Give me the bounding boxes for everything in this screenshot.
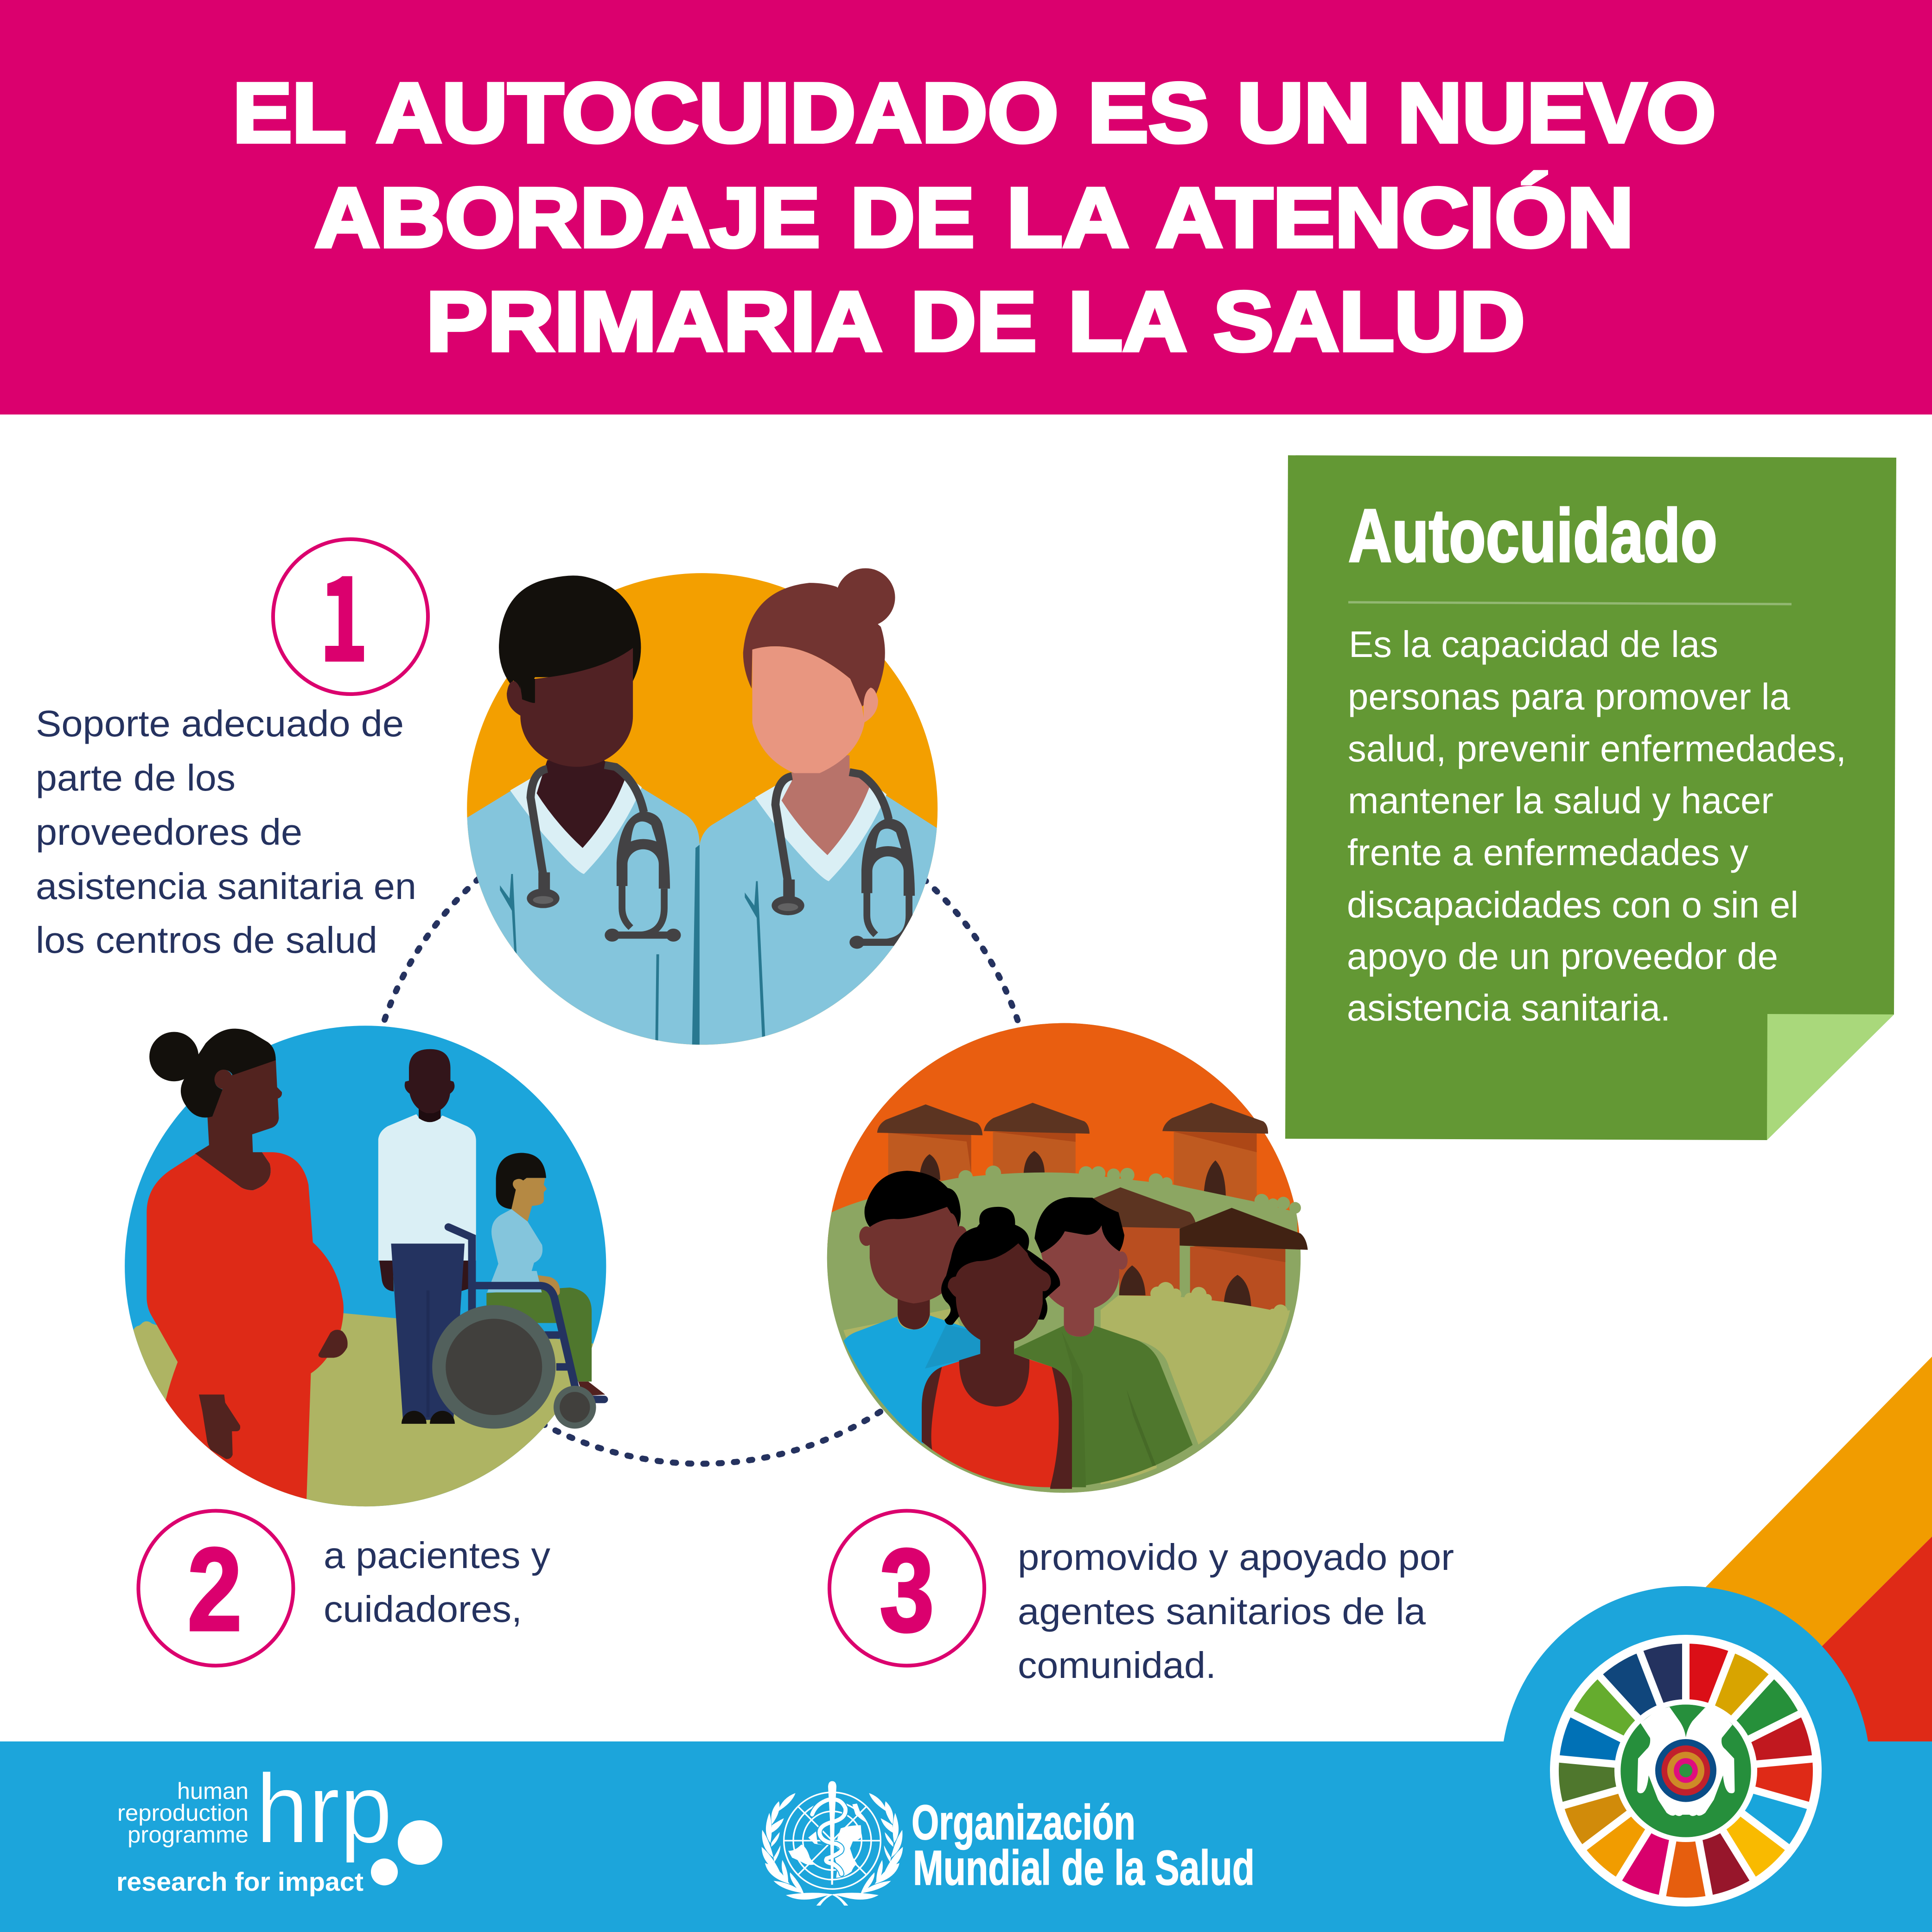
snake and staff — [812, 1799, 846, 1874]
back hill — [816, 1173, 1297, 1498]
title: ATENCIÓN — [1156, 170, 1634, 265]
title: DE — [850, 170, 975, 265]
wheel segments — [1551, 1636, 1820, 1904]
step 1 text: parte de los — [36, 757, 236, 798]
logo: hrp research for impact: hrp — [256, 1753, 392, 1863]
note body text: Es la capacidad de las — [1349, 624, 1718, 665]
title: DE — [911, 274, 1037, 369]
laurel wreath right — [861, 1793, 903, 1893]
step 3 text — [1018, 1537, 1454, 1686]
left provider — [499, 575, 641, 848]
step 1 number badge — [273, 526, 428, 694]
title: NUEVO — [1397, 65, 1716, 160]
logo: WHO emblem — [762, 1781, 903, 1906]
note body text: discapacidades con o sin el — [1347, 884, 1798, 925]
step 2 number badge — [138, 1511, 293, 1665]
illustration: community health workers and village — [816, 1011, 1326, 1498]
note body text: frente a enfermedades y — [1347, 832, 1748, 873]
step 3 text: promovido y apoyado por — [1018, 1537, 1454, 1578]
step 1 text — [36, 703, 416, 961]
front hill — [839, 1282, 1323, 1498]
dotted ring connecting the three circles — [366, 794, 1036, 1464]
globe — [784, 1792, 880, 1889]
step 1 text: los centros de salud — [36, 919, 377, 961]
logo text: Organización Mundial de la Salud — [912, 1795, 1255, 1895]
uniforms — [467, 772, 937, 1067]
logo: hrp research for impact — [116, 1753, 442, 1897]
pregnant woman — [145, 1029, 348, 1531]
step 2 text: a pacientes y — [324, 1535, 550, 1576]
logo: Sustainable Development Goals wheel — [1550, 1635, 1822, 1906]
title: SALUD — [1213, 274, 1525, 369]
logo text: Organización Mundial de la Salud: Organización — [912, 1795, 1135, 1850]
woman in wheelchair — [486, 1153, 605, 1396]
title: LA — [1068, 274, 1187, 369]
logo: hrp research for impact: research for impact — [116, 1867, 363, 1897]
title: ABORDAJE — [315, 170, 820, 265]
title: ES — [1088, 65, 1209, 160]
step 1 text: Soporte adecuado de — [36, 703, 404, 744]
panel: Autocuidado definition note — [1285, 455, 1896, 1140]
corner stripes — [1705, 1357, 1932, 1762]
back houses — [877, 1103, 1268, 1203]
title: AUTOCUIDADO — [376, 65, 1058, 160]
right provider — [743, 568, 895, 855]
note heading: Autocuidado — [1348, 494, 1717, 578]
illustration: health-care providers — [467, 568, 937, 1067]
stethoscope right — [772, 772, 918, 949]
laurel wreath left — [762, 1793, 803, 1893]
note body text: apoyo de un proveedor de — [1347, 936, 1778, 977]
step 1 number badge: 1 — [319, 526, 369, 694]
note body text: mantener la salud y hacer — [1348, 780, 1773, 821]
footer band — [0, 1586, 1932, 1932]
bushes — [958, 1166, 1301, 1214]
title: EL — [233, 65, 346, 160]
stethoscope left — [527, 765, 681, 942]
logo: hrp research for impact: reproduction — [117, 1800, 249, 1826]
note body text: salud, prevenir enfermedades, — [1348, 728, 1846, 769]
title: LA — [1007, 170, 1129, 265]
person right, green shirt — [1014, 1197, 1200, 1487]
logo text: Organización Mundial de la Salud: Mundial de la Salud — [913, 1841, 1255, 1895]
ribbon — [786, 1893, 879, 1900]
step 3 text: agentes sanitarios de la — [1018, 1591, 1426, 1632]
folded corner — [1767, 1014, 1894, 1140]
logo: hrp research for impact: human — [177, 1778, 249, 1804]
title: PRIMARIA — [426, 274, 882, 369]
person left, blue shirt — [844, 1171, 985, 1448]
wheelchair — [432, 1227, 604, 1428]
step 2 number badge: 2 — [187, 1524, 242, 1656]
woman in front, red dress — [922, 1207, 1072, 1489]
note body text — [1347, 624, 1846, 1028]
ground — [134, 1313, 593, 1507]
man standing — [378, 1049, 476, 1424]
note body text: asistencia sanitaria. — [1347, 987, 1671, 1028]
step 3 number badge: 3 — [880, 1524, 934, 1657]
step 3 text: comunidad. — [1018, 1645, 1216, 1686]
step 2 text: cuidadores, — [324, 1588, 522, 1630]
front houses — [1092, 1187, 1308, 1312]
note body text: personas para promover la — [1348, 676, 1790, 717]
step 1 text: proveedores de — [36, 811, 302, 853]
step 2 text — [324, 1535, 550, 1630]
step 3 number badge — [829, 1511, 984, 1665]
illustration: patients and caregivers — [111, 1026, 610, 1531]
logo: hrp research for impact: programme — [128, 1822, 249, 1848]
step 1 text: asistencia sanitaria en — [36, 866, 416, 907]
title: UN — [1237, 65, 1371, 160]
header banner — [0, 0, 1932, 414]
title — [233, 65, 1716, 369]
wheel centre with hands — [1620, 1704, 1751, 1837]
